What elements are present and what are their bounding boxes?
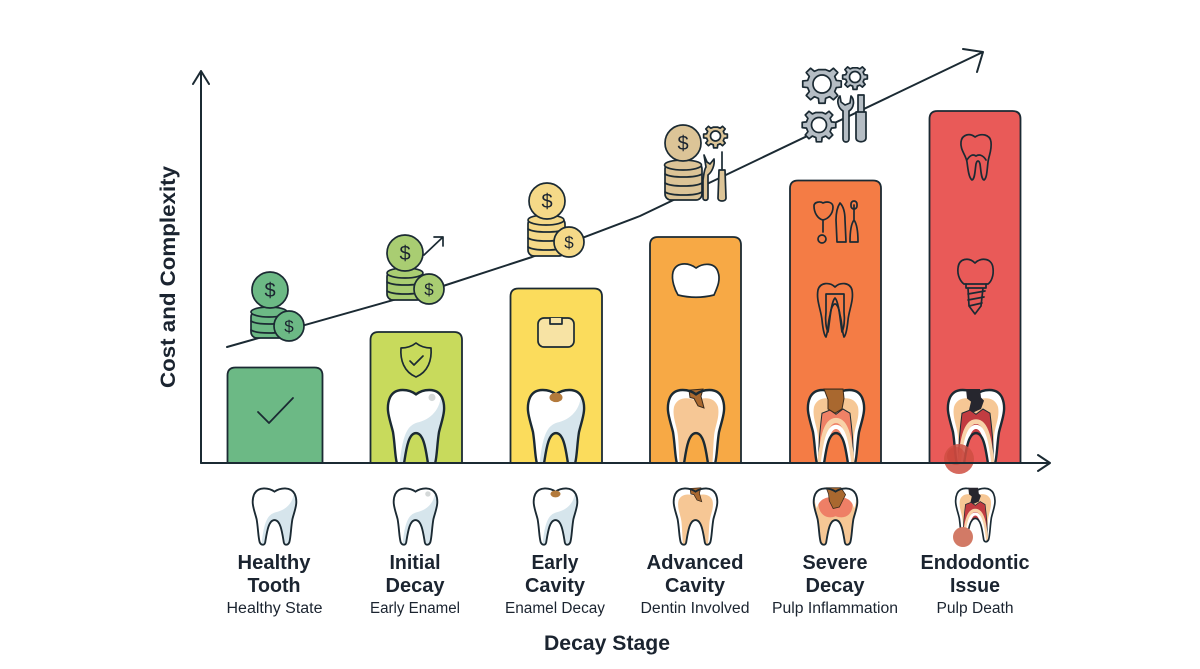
- icon: dental implant: [958, 259, 993, 314]
- bar: initial decay: [370, 332, 462, 470]
- stage: early cavity: Cavity: [525, 575, 586, 597]
- stage: healthy tooth: Tooth: [248, 575, 300, 597]
- icon: tooth with dentin cavity: [668, 389, 724, 468]
- stage: advanced cavity: [640, 488, 750, 617]
- bar: advanced cavity: [650, 237, 741, 468]
- icon: endodontic tooth: [953, 488, 995, 547]
- icon: dental tools: [814, 201, 858, 243]
- stage: initial decay: Early Enamel: [370, 600, 460, 617]
- icon: lime coins with arrow: $: [399, 243, 411, 265]
- icon: tooth with white spot: [388, 390, 447, 470]
- stage: severe decay: Decay: [806, 575, 865, 597]
- icon: tooth with brown spot: [528, 390, 587, 470]
- icon: yellow coins: $: [541, 191, 553, 213]
- bar chart: [228, 111, 1020, 474]
- stage: initial decay: [370, 488, 460, 617]
- stage: advanced cavity: Advanced: [646, 552, 744, 574]
- y axis: [193, 71, 209, 463]
- trend arrow: [227, 49, 983, 347]
- y axis title: Cost and Complexity: [157, 166, 180, 388]
- icon: check mark: [258, 398, 293, 423]
- stage: severe decay: [772, 488, 898, 617]
- stage: initial decay: Decay: [386, 575, 445, 597]
- x axis: [201, 455, 1050, 471]
- stage: endodontic issue: Endodontic: [920, 552, 1030, 574]
- stage: severe decay: Severe: [802, 552, 868, 574]
- icon: tooth outline: [961, 135, 991, 180]
- icon: lime coins with arrow: [387, 235, 444, 304]
- stage: advanced cavity: Cavity: [665, 575, 726, 597]
- icon: initial decay tooth: [394, 488, 440, 547]
- icon: abscess: [944, 444, 974, 474]
- bar: endodontic issue: [930, 111, 1020, 474]
- stage: healthy tooth: Healthy State: [226, 600, 322, 617]
- stage: healthy tooth: Healthy: [238, 552, 311, 574]
- stage: healthy tooth: [226, 488, 322, 617]
- icon: gears and tools: [802, 67, 867, 142]
- x axis title: Decay Stage: [544, 632, 670, 655]
- icon: tooth with severe decay: [808, 389, 864, 470]
- icon: dental crown: [672, 264, 719, 297]
- icon: lime coins with arrow: $: [424, 280, 434, 299]
- icon: severe decay tooth: [814, 488, 857, 545]
- icon: advanced cavity tooth: [674, 488, 717, 546]
- stage: endodontic issue: [920, 488, 1030, 617]
- icon: yellow coins: $: [564, 233, 574, 252]
- stage: early cavity: Enamel Decay: [505, 600, 605, 617]
- stage: initial decay: Initial: [390, 552, 440, 574]
- icon: green coins: [251, 272, 304, 341]
- icon: healthy tooth: [253, 488, 299, 547]
- bar: healthy tooth: [228, 368, 322, 463]
- icon: tan coins with tools: $: [677, 133, 689, 155]
- icon: yellow coins: [528, 183, 584, 257]
- icon: filling block: [538, 318, 574, 347]
- icon: root canal outline: [818, 284, 852, 337]
- icon: tooth with dead pulp: [948, 389, 1004, 470]
- stage: early cavity: Early: [532, 552, 579, 574]
- icon: green coins: $: [264, 280, 276, 302]
- bar: severe decay: [790, 180, 881, 470]
- stage: advanced cavity: Dentin Involved: [640, 600, 750, 617]
- icon: early cavity tooth: [534, 488, 580, 547]
- icon: shield with check: [401, 343, 431, 377]
- stage: endodontic issue: Issue: [950, 575, 1000, 597]
- stage: severe decay: Pulp Inflammation: [772, 600, 898, 617]
- icon: tan coins with tools: [664, 125, 727, 201]
- icon: green coins: $: [284, 317, 294, 336]
- stage: endodontic issue: Pulp Death: [936, 600, 1014, 617]
- bar: early cavity: [510, 288, 602, 470]
- stage: early cavity: [505, 488, 605, 617]
